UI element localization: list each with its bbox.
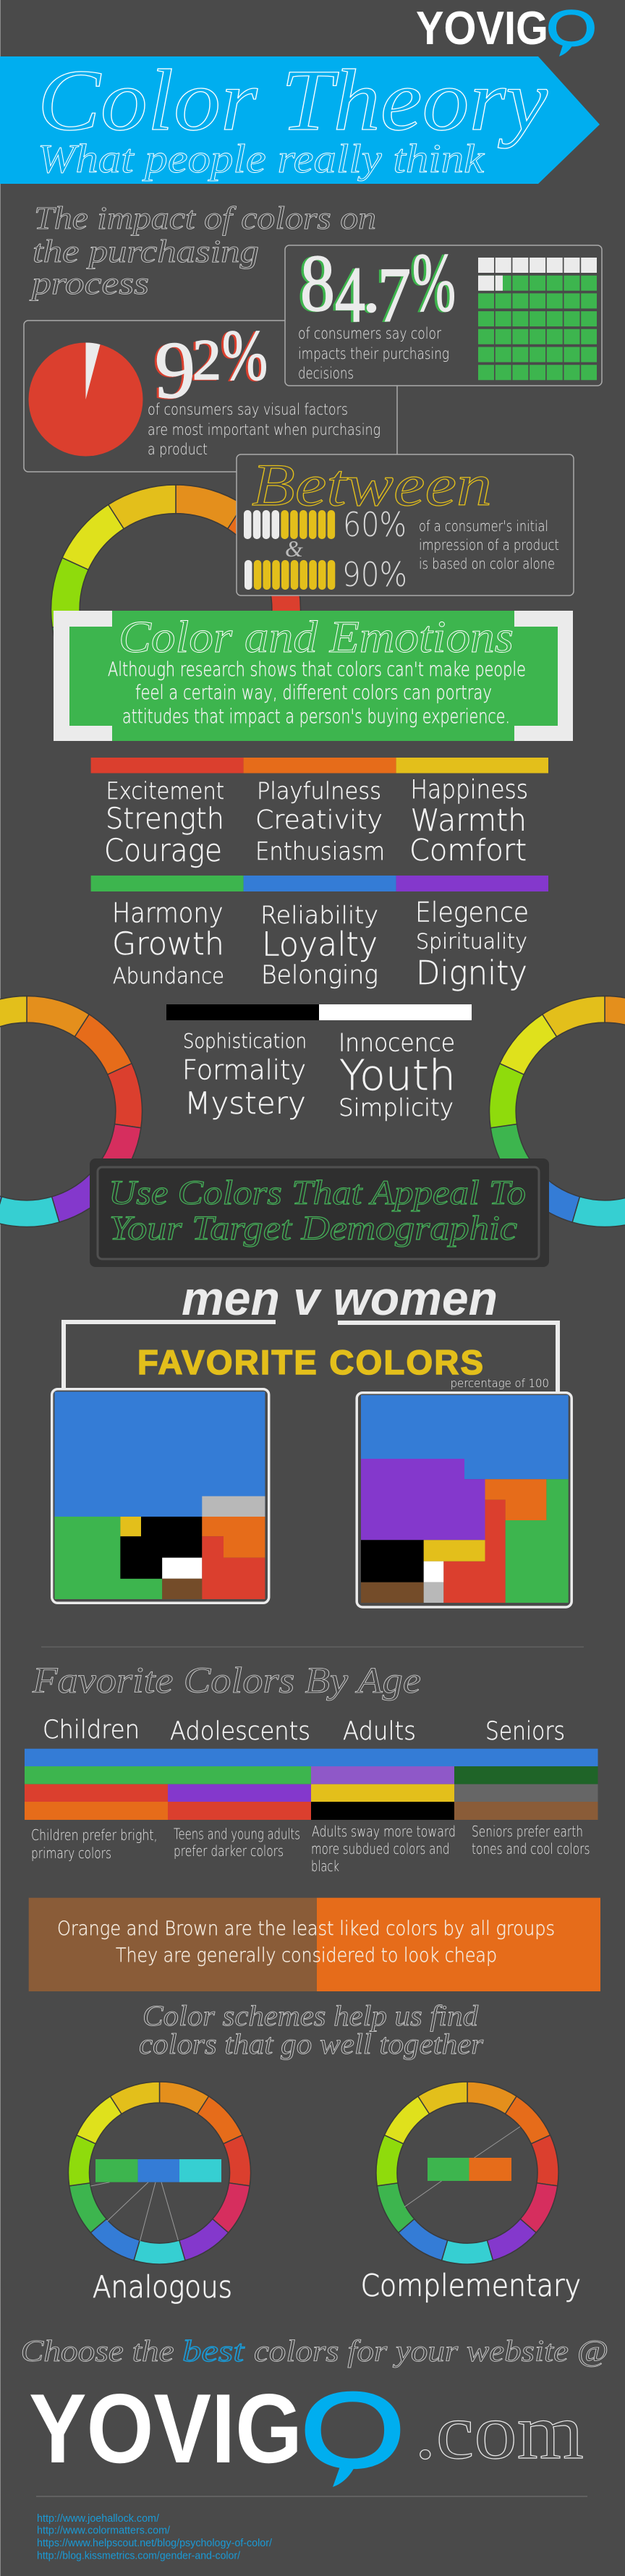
sources: http://www.joehallock.com/ (37, 2512, 160, 2525)
panel: between 60 and 90 percent (237, 452, 574, 596)
text: seniors: Seniors prefer earth (472, 1823, 583, 1840)
callout: target demographic: Your Target Demographic (109, 1209, 517, 1247)
color bar: cool (91, 876, 548, 891)
logo: Yovigo footer (29, 2371, 584, 2490)
words: green: Growth (112, 926, 224, 962)
text: color impacts (298, 325, 449, 382)
pill bar: 60 percent (244, 510, 335, 539)
sources: http://www.colormatters.com/ (37, 2525, 171, 2537)
callout: target demographic: Use Colors That Appeal To (109, 1174, 526, 1212)
text: initial impression (419, 517, 559, 572)
heading: choose the best colors (21, 2335, 608, 2368)
note: percentage of 100: percentage of 100 (451, 1376, 549, 1390)
chart: men treemap (52, 1389, 269, 1603)
words: purple: Dignity (416, 954, 527, 992)
logo: Yovigo footer: YOVIG (29, 2373, 302, 2483)
text: initial impression: impression of a product (419, 536, 559, 554)
words: red: Courage (104, 833, 222, 869)
words: green (112, 898, 224, 989)
waffle chart (478, 265, 597, 373)
words: white: Simplicity (339, 1093, 454, 1122)
age labels: Seniors (485, 1717, 565, 1746)
words: white: Innocence (339, 1029, 455, 1058)
subtitle: What people really think (38, 137, 485, 182)
label: complementary: Complementary (361, 2268, 581, 2303)
stat: 84.7%: 7 (378, 253, 411, 339)
sources (37, 2512, 273, 2562)
callout: target demographic (90, 1158, 549, 1267)
stat: 92%: % (222, 315, 268, 395)
chart: women treemap (357, 1393, 571, 1607)
words: yellow (409, 775, 528, 868)
color wheel: analogous (69, 2082, 250, 2264)
heading: choose the best colors: Choose the (21, 2335, 174, 2368)
stat: 84.7%: 4 (335, 250, 365, 339)
text: color impacts: impacts their purchasing (298, 345, 449, 363)
text: seniors (472, 1823, 590, 1857)
color bar: warm (91, 758, 548, 773)
words: yellow: Comfort (409, 833, 527, 868)
words: orange: Playfulness (257, 777, 381, 805)
heading: men v women: men v women (182, 1271, 498, 1325)
panel: 84.7 percent (285, 237, 602, 386)
age labels: Children (43, 1716, 140, 1745)
text: emotions intro (108, 658, 526, 728)
text: visual factors (148, 401, 380, 458)
heading: favorite colors: FAVORITE COLORS (137, 1343, 483, 1381)
text: children (31, 1826, 158, 1862)
words: blue (260, 901, 378, 990)
words: green: Harmony (112, 898, 223, 929)
color wheel: left (0, 996, 142, 1226)
stat: 84.7%: % (412, 237, 456, 329)
color wheel: complementary (376, 2082, 558, 2264)
text: initial impression: of a consumer's initial (419, 517, 548, 535)
bracket: men v women (64, 1322, 558, 1391)
words: black (182, 1029, 307, 1121)
words: red (104, 777, 224, 869)
logo: Yovigo footer: .com (414, 2388, 584, 2475)
text: visual factors: are most important when purchasing (148, 421, 380, 438)
stat: 92%: 9 (155, 326, 195, 415)
callout: orange and brown: Orange and Brown are the least liked colors by all groups (57, 1918, 555, 1940)
label: analogous: Analogous (93, 2269, 232, 2305)
words: green: Abundance (113, 964, 224, 989)
logo: Yovigo header: O (546, 0, 597, 56)
words: purple: Spirituality (416, 929, 527, 954)
logo: Yovigo footer: O (300, 2371, 405, 2490)
callout: orange and brown: They are generally considered to look cheap (116, 1944, 497, 1967)
text: adolescents: Teens and young adults (174, 1826, 300, 1843)
heading: color schemes: Color schemes help us find (143, 1999, 479, 2032)
color bar: black and white (166, 1004, 472, 1020)
label: ampersand: & (285, 535, 303, 562)
label: 60%: 60% (343, 505, 407, 544)
text: emotions intro: attitudes that impact a person's buying experience. (122, 706, 510, 728)
words: red: Strength (106, 802, 224, 836)
sources: http://blog.kissmetrics.com/gender-and-color/ (37, 2550, 241, 2562)
text: color impacts: of consumers say color (298, 325, 441, 342)
text: children: Children prefer bright, (31, 1826, 158, 1844)
panel: 92 percent (24, 315, 397, 472)
words: orange (255, 777, 385, 866)
banner: title arrow (0, 52, 600, 184)
words: red: Excitement (106, 777, 224, 805)
text: adults: more subdued colors and (311, 1840, 450, 1857)
heading: impact of colors: the purchasing (33, 234, 259, 269)
text: children: primary colors (31, 1844, 111, 1862)
stat: 84.7%: 8 (300, 239, 335, 329)
words: orange: Enthusiasm (255, 837, 385, 866)
heading: color schemes: colors that go well together (139, 2028, 483, 2060)
text: visual factors: of consumers say visual factors (148, 401, 348, 418)
chart: colors by age (25, 1749, 598, 1820)
heading: between: Between (252, 452, 492, 518)
words: black: Formality (182, 1055, 306, 1086)
text: adults (311, 1823, 456, 1875)
text: adolescents: prefer darker colors (174, 1842, 284, 1860)
stat: 84.7%: . (362, 247, 380, 327)
text: seniors: tones and cool colors (472, 1840, 590, 1857)
age labels: Adults (343, 1717, 416, 1746)
text: adolescents (174, 1826, 300, 1860)
pill bar: 90 percent (245, 560, 335, 590)
heading: choose the best colors: colors for your website @ (254, 2335, 608, 2368)
heading: impact of colors (29, 200, 376, 301)
age labels: Adolescents (170, 1717, 310, 1746)
callout: orange and brown (29, 1898, 600, 1991)
text: adults: Adults sway more toward (312, 1823, 456, 1840)
color wheel: top (51, 485, 300, 734)
heading: color schemes (139, 1999, 483, 2060)
text: emotions intro: feel a certain way, different colors can portray (135, 682, 492, 704)
logo: Yovigo header: YOVIG (416, 1, 548, 54)
words: purple (415, 897, 529, 992)
heading: impact of colors: The impact of colors on (34, 200, 376, 236)
label: 90%: 90% (342, 555, 407, 594)
words: blue: Reliability (260, 901, 378, 929)
panel: color and emotions (54, 611, 573, 741)
pie chart (29, 342, 143, 456)
words: white (339, 1029, 456, 1122)
color wheel: right (490, 996, 625, 1226)
words: blue: Loyalty (262, 925, 378, 964)
heading: favorite colors by age: Favorite Colors By Age (32, 1661, 421, 1701)
heading: color and emotions: Color and Emotions (119, 613, 514, 662)
words: yellow: Warmth (411, 802, 527, 838)
text: adults: black (311, 1857, 339, 1875)
age labels (43, 1716, 565, 1746)
text: initial impression: is based on color alone (419, 555, 555, 572)
title: Color Theory (38, 52, 548, 149)
heading: choose the best colors: best (182, 2335, 245, 2368)
stat: 92%: 2 (192, 329, 221, 392)
text: visual factors: a product (148, 441, 208, 458)
words: white: Youth (339, 1051, 456, 1100)
sources: https://www.helpscout.net/blog/psychology-of-color/ (37, 2537, 273, 2549)
words: yellow: Happiness (411, 775, 528, 805)
words: blue: Belonging (261, 961, 378, 990)
text: color impacts: decisions (298, 365, 354, 382)
words: black: Mystery (184, 1085, 306, 1121)
words: black: Sophistication (183, 1029, 307, 1053)
words: purple: Elegence (415, 897, 529, 928)
words: orange: Creativity (255, 805, 383, 835)
heading: impact of colors: process (29, 266, 149, 301)
